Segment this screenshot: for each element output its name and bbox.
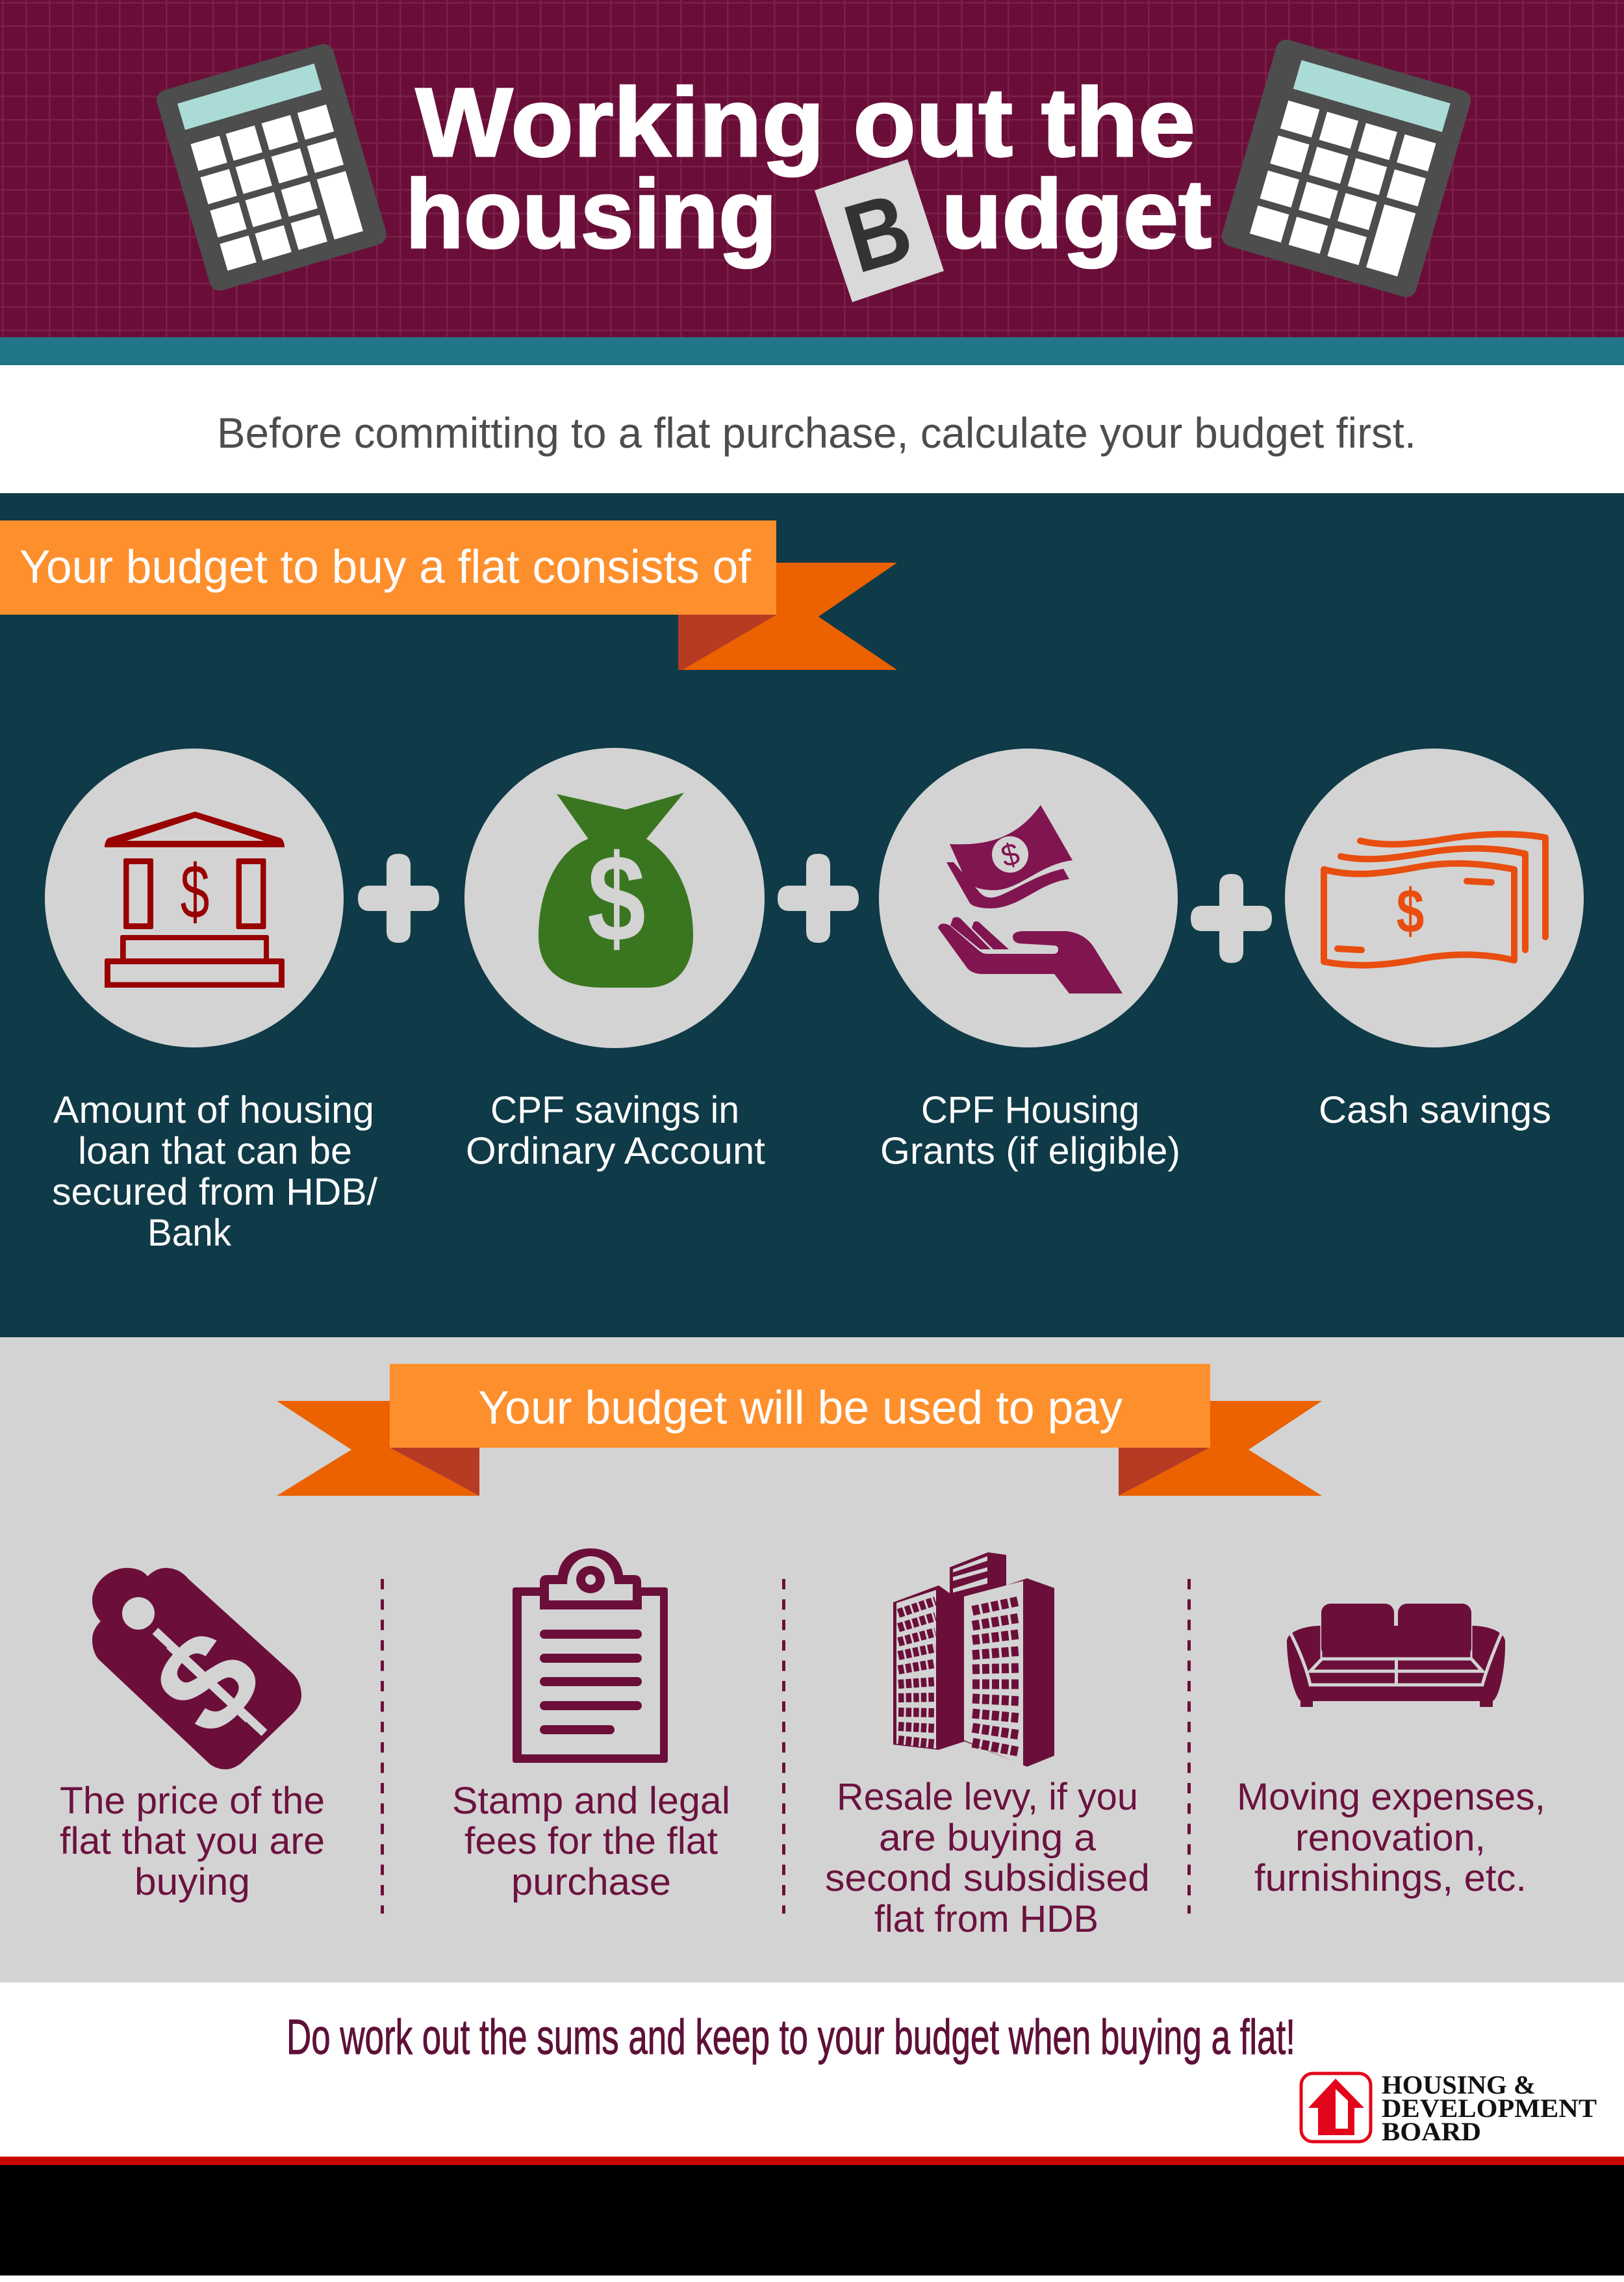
caption: flat price: flat that you are: [60, 1820, 325, 1862]
item: CPF savings: [464, 748, 765, 1172]
item: CPF housing grants: [879, 749, 1180, 1172]
icon: right calculator: [1219, 37, 1473, 300]
icon: left calculator: [154, 42, 389, 293]
caption: moving expenses: Moving expenses,: [1237, 1776, 1545, 1818]
icon: stack of banknotes: $: [1397, 877, 1424, 946]
icon: hand receiving money: $: [998, 836, 1023, 875]
caption: flat price: [60, 1780, 325, 1903]
HDB logo: BOARD: [1382, 2117, 1481, 2146]
caption: CPF savings: [466, 1089, 765, 1172]
plus sign 1: [358, 854, 439, 943]
plus sign 3: [1191, 874, 1272, 963]
caption: CPF housing grants: [880, 1089, 1180, 1172]
caption: CPF housing grants: Grants (if eligible): [880, 1130, 1180, 1172]
ribbon heading: budget consists of: Your budget to buy a flat consists of: [19, 541, 752, 593]
HDB logo: [1301, 2070, 1597, 2146]
panel: budget used to pay: [0, 1337, 1624, 1982]
caption: cash savings: Cash savings: [1319, 1089, 1551, 1131]
caption: resale levy: second subsidised: [825, 1857, 1150, 1899]
panel: budget consists of: [0, 493, 1624, 1337]
icon: HDB house mark: [1301, 2073, 1371, 2142]
icon: bank: $: [181, 850, 209, 935]
icon: hand receiving money: [938, 805, 1123, 994]
ribbon heading: budget consists of: [0, 520, 897, 670]
footer bar: [0, 2157, 1624, 2276]
icon: stack of banknotes: [1324, 834, 1545, 965]
item: cash savings: [1285, 749, 1584, 1131]
plus sign 2: [778, 854, 859, 943]
caption: flat price: buying: [134, 1861, 250, 1903]
caption: housing loan: loan that can be: [78, 1130, 352, 1172]
title: Working out the: [416, 68, 1195, 177]
caption: moving expenses: furnishings, etc.: [1254, 1857, 1527, 1899]
caption: resale levy: are buying a: [879, 1817, 1097, 1859]
title: housing: [405, 159, 777, 268]
item: housing loan: [45, 749, 378, 1254]
icon: letter B tile: B: [833, 172, 922, 294]
icon: money bag: $: [587, 830, 646, 968]
caption: stamp and legal fees: [452, 1780, 730, 1903]
icon: money bag: [539, 793, 693, 988]
caption: resale levy: flat from HDB: [874, 1898, 1098, 1940]
caption: resale levy: [825, 1776, 1150, 1940]
header banner: [0, 0, 1624, 365]
caption: flat price: The price of the: [60, 1780, 325, 1822]
title: udget: [941, 159, 1212, 268]
title: [405, 68, 1212, 302]
item: moving expenses: [1237, 1604, 1545, 1899]
caption: stamp and legal fees: purchase: [511, 1861, 671, 1903]
caption: stamp and legal fees: fees for the flat: [464, 1820, 718, 1862]
caption: CPF housing grants: CPF Housing: [921, 1089, 1139, 1131]
ribbon heading: budget used to pay: Your budget will be used to pay: [478, 1382, 1123, 1434]
icon: price tag: [92, 1568, 301, 1769]
HDB logo: DEVELOPMENT: [1382, 2094, 1597, 2123]
item: flat price: [60, 1568, 325, 1903]
icon: bank: [105, 812, 285, 988]
item: resale levy: [825, 1552, 1150, 1940]
caption: resale levy: Resale levy, if you: [837, 1776, 1138, 1818]
icon: sofa: [1287, 1604, 1505, 1707]
caption: stamp and legal fees: Stamp and legal: [452, 1780, 730, 1822]
caption: CPF savings: CPF savings in: [490, 1089, 739, 1131]
item: stamp and legal fees: [452, 1548, 730, 1903]
icon: letter B tile: [815, 159, 944, 302]
caption: housing loan: secured from HDB/: [52, 1171, 378, 1213]
intro text: Before committing to a flat purchase, calculate your budget first.: [217, 409, 1416, 457]
caption: housing loan: [52, 1089, 378, 1254]
icon: price tag: $: [125, 1601, 290, 1762]
caption: housing loan: Amount of housing: [53, 1089, 374, 1131]
icon: apartment towers: [893, 1552, 1054, 1767]
ribbon heading: budget used to pay: [277, 1364, 1322, 1496]
icon: clipboard: [513, 1548, 668, 1763]
caption: housing loan: Bank: [147, 1212, 232, 1254]
HDB logo: HOUSING &: [1382, 2070, 1536, 2099]
caption: CPF savings: Ordinary Account: [466, 1130, 765, 1172]
caption: moving expenses: renovation,: [1295, 1817, 1486, 1859]
caption: moving expenses: [1237, 1776, 1545, 1899]
